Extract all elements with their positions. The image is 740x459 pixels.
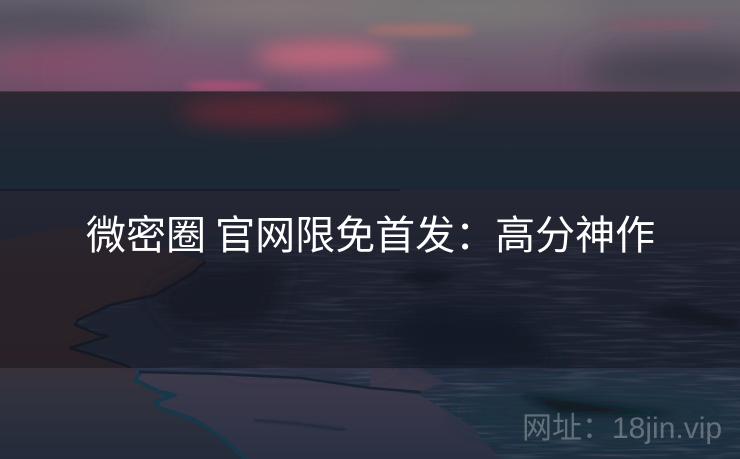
watermark: 网址：18jin.vip (522, 412, 722, 445)
title: 微密圈 官网限免首发：高分神作 (86, 214, 655, 258)
sea (0, 90, 740, 191)
dark overlay band (0, 92, 740, 368)
sky (0, 0, 740, 98)
beach and water (0, 189, 740, 459)
